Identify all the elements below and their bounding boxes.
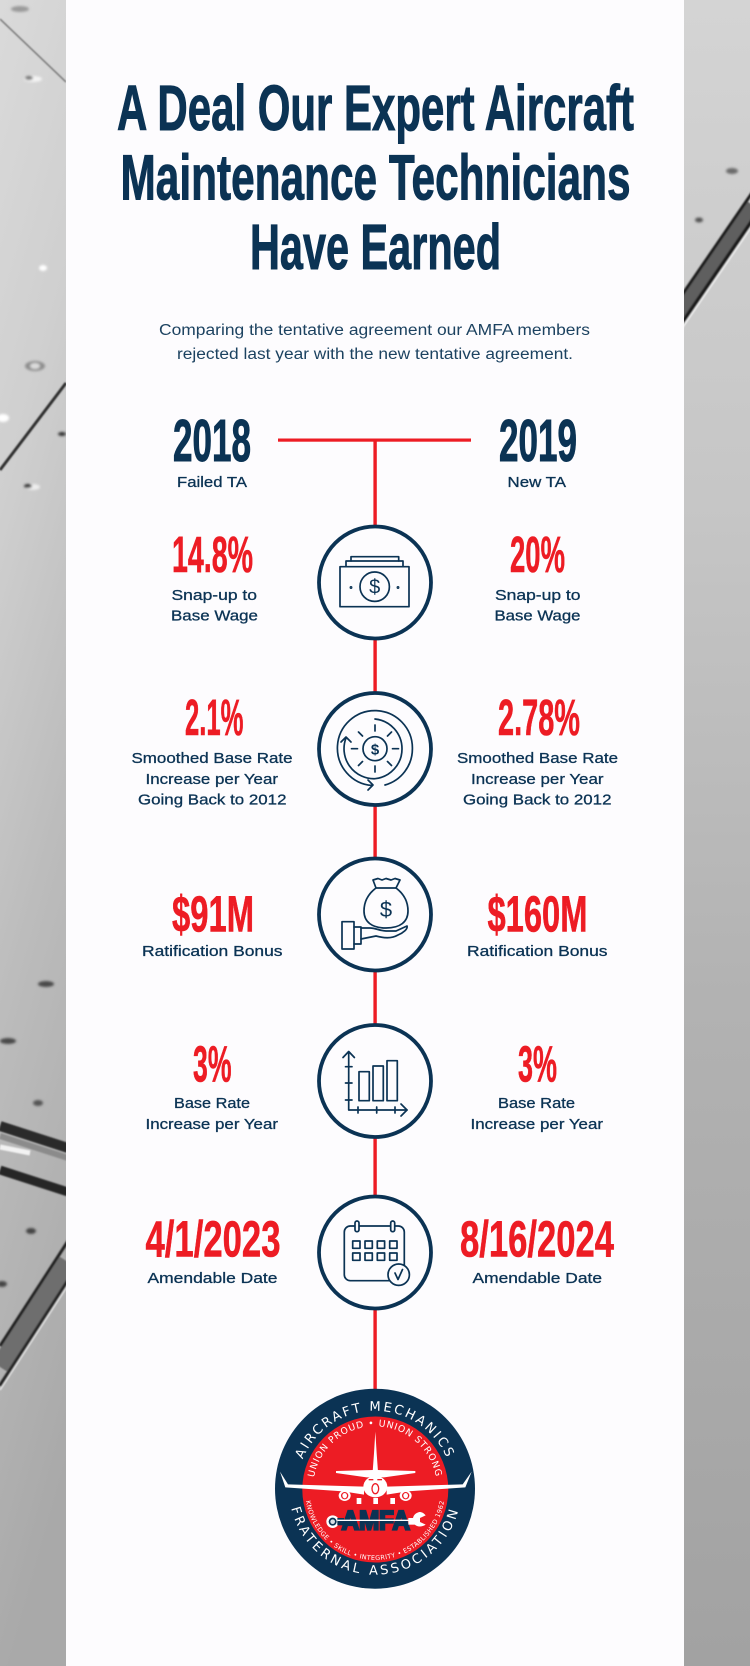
icon: calendar with check: [319, 1196, 431, 1308]
logo: AMFA seal: AIRCRAFT MECHANICS: [296, 1401, 454, 1460]
stat right: $160M bonus: Ratification Bonus: [467, 943, 608, 960]
stat right: 20% snap-up: [494, 526, 580, 624]
stat left: 2.1% smoothed: Increase per Year: [146, 771, 278, 788]
logo: AMFA seal: UNION PROUD • UNION STRONG: [308, 1420, 442, 1476]
stat right: 20% snap-up: Base Wage: [494, 608, 580, 624]
stat right: 3% increase: Base Rate: [498, 1095, 575, 1112]
logo: AMFA seal: FRATERNAL ASSOCIATION: [292, 1506, 458, 1575]
stat right: 3% increase: Increase per Year: [470, 1116, 603, 1133]
stat right: 20% snap-up: 20%: [510, 526, 565, 583]
stat right: $160M bonus: [467, 886, 608, 960]
stat right: 3% increase: 3%: [518, 1036, 557, 1092]
logo: AMFA seal: AMFA: [342, 1505, 410, 1535]
stat right: 2.78% smoothed: Going Back to 2012: [463, 792, 612, 808]
stat right: 8/16/2024 date: Amendable Date: [472, 1270, 602, 1287]
stat left: 4/1/2023 date: 4/1/2023: [146, 1210, 280, 1268]
background: left metal strip: [0, 0, 70, 1666]
icon: hand holding money bag: [319, 858, 431, 970]
stat left: 14.8% snap-up: 14.8%: [172, 526, 253, 583]
column heading: 2019 New TA: 2019: [499, 408, 577, 474]
icon: hand holding money bag: $: [380, 897, 392, 922]
stat right: 2.78% smoothed: Increase per Year: [471, 771, 604, 788]
icon: dollar dial with circular arrows: $: [371, 742, 380, 758]
icon: dollar dial with circular arrows: [319, 693, 431, 805]
stat left: 4/1/2023 date: [146, 1210, 280, 1287]
column heading: 2019 New TA: [499, 408, 577, 491]
column heading: 2019 New TA: New TA: [508, 474, 566, 491]
column heading: 2018 Failed TA: Failed TA: [177, 474, 247, 491]
stat left: 2.1% smoothed: 2.1%: [185, 689, 244, 746]
stat right: 2.78% smoothed: [457, 689, 618, 808]
stat left: $91M bonus: $91M: [172, 886, 254, 942]
subtitle: rejected last year with the new tentative agreement.: [177, 346, 573, 363]
stat left: 2.1% smoothed: Going Back to 2012: [138, 792, 286, 808]
stat right: 8/16/2024 date: [460, 1210, 614, 1287]
stat left: $91M bonus: Ratification Bonus: [142, 943, 282, 960]
column heading: 2018 Failed TA: 2018: [173, 408, 251, 474]
icon: bar chart: [319, 1025, 431, 1137]
icon: money bills: $: [369, 576, 380, 598]
icon: money bills: [319, 526, 431, 638]
stat left: 3% increase: Base Rate: [174, 1095, 250, 1112]
stat right: $160M bonus: $160M: [488, 886, 588, 942]
background: right metal strip: [680, 0, 750, 1666]
stat left: $91M bonus: [142, 886, 282, 960]
subtitle: [159, 322, 590, 363]
title: Have Earned: [250, 211, 501, 283]
logo: AMFA seal: KNOWLEDGE • SKILL • INTEGRITY • ESTABLISHED 1962: [306, 1500, 444, 1560]
stat right: 20% snap-up: Snap-up to: [495, 587, 580, 604]
stat left: 14.8% snap-up: [171, 526, 258, 624]
stat right: 8/16/2024 date: 8/16/2024: [460, 1210, 614, 1268]
logo: AMFA seal: [275, 1388, 475, 1589]
stat left: 3% increase: [146, 1036, 278, 1133]
stat left: 2.1% smoothed: [132, 689, 292, 808]
stat right: 2.78% smoothed: 2.78%: [498, 689, 580, 746]
stat right: 3% increase: [470, 1036, 603, 1133]
column heading: 2018 Failed TA: [173, 408, 251, 491]
stat right: 2.78% smoothed: Smoothed Base Rate: [457, 750, 618, 767]
stat left: 3% increase: Increase per Year: [146, 1116, 278, 1133]
subtitle: Comparing the tentative agreement our AMFA members: [159, 322, 590, 339]
title: [117, 72, 634, 283]
stat left: 4/1/2023 date: Amendable Date: [148, 1270, 278, 1287]
stat left: 2.1% smoothed: Smoothed Base Rate: [132, 750, 292, 767]
timeline connector lines: [278, 438, 471, 1390]
stat left: 14.8% snap-up: Base Wage: [171, 608, 258, 624]
stat left: 14.8% snap-up: Snap-up to: [172, 587, 257, 604]
stat left: 3% increase: 3%: [193, 1036, 232, 1092]
